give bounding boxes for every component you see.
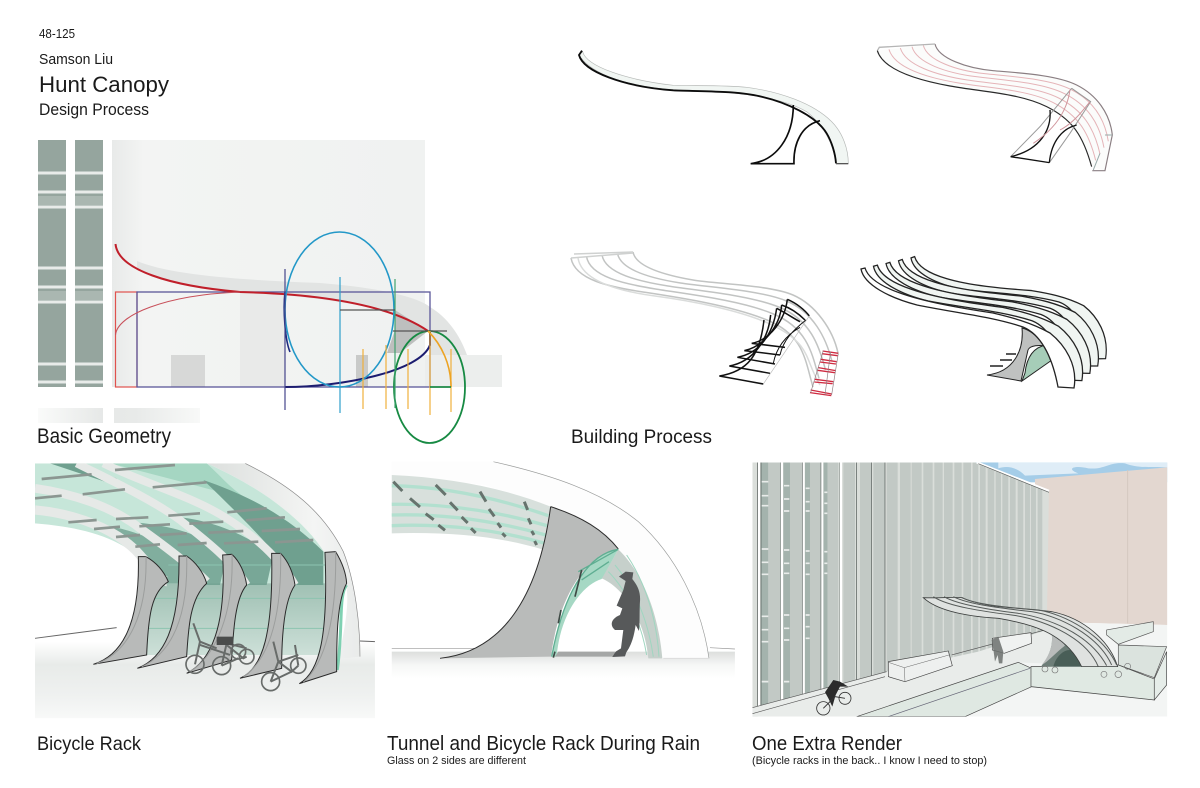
pedestrian	[992, 637, 1003, 663]
heading: basic geometry: Basic Geometry	[37, 425, 171, 448]
blue ellipse	[285, 232, 394, 387]
rear planter	[1107, 622, 1153, 644]
roof slats	[393, 482, 537, 545]
arch interior	[602, 549, 662, 658]
ground	[35, 650, 375, 716]
white canopy mass	[662, 652, 708, 658]
heading: one extra render: One Extra Render	[752, 733, 902, 755]
author name: Samson Liu	[39, 51, 113, 68]
front rib	[861, 268, 1075, 388]
glass ceiling band	[392, 475, 551, 550]
sidewalk	[752, 631, 1052, 716]
canopy ribs	[923, 597, 1118, 667]
support frame	[1011, 88, 1112, 170]
dark glass patches	[50, 463, 323, 585]
diagram: single rib profile	[579, 51, 848, 164]
far bench	[992, 633, 1032, 653]
person silhouette	[612, 572, 640, 657]
diagram: finished five-rib canopy	[861, 239, 1106, 388]
sky	[975, 462, 1167, 482]
heading: tunnel and bicycle rack: Tunnel and Bicycle Rack During Rain	[387, 733, 700, 755]
pink wall	[1035, 467, 1167, 625]
diagram: rib surface with red guide curves	[877, 44, 1112, 171]
five rib curves	[571, 252, 838, 387]
render: tunnel during rain	[392, 462, 735, 678]
white rib bands	[35, 463, 295, 585]
clouds	[998, 462, 1167, 476]
rear edge	[935, 44, 1112, 171]
top edge	[877, 44, 935, 51]
project number: 48-125	[39, 26, 75, 41]
red guide curves	[889, 45, 1108, 160]
caption: glass note: Glass on 2 sides are different	[387, 755, 526, 767]
cyclist	[817, 680, 851, 715]
white outer canopy wing	[207, 463, 360, 659]
front edge	[877, 51, 1092, 167]
panel: basic geometry	[38, 140, 502, 443]
back glass wall	[147, 583, 325, 655]
project title: Hunt Canopy	[39, 72, 170, 97]
thin red curve	[116, 292, 240, 335]
red base ladder	[810, 351, 838, 396]
green base line	[430, 386, 451, 388]
roof slats	[35, 465, 313, 547]
glass wall rails	[147, 565, 325, 628]
green ellipse	[394, 331, 465, 443]
left planter	[857, 662, 1032, 717]
glass arch	[1022, 345, 1052, 381]
bicycles	[186, 623, 306, 691]
navy circle arc	[284, 292, 290, 352]
heading: building process: Building Process	[571, 426, 712, 448]
building elevation backdrop	[38, 140, 502, 423]
construction axes	[285, 269, 451, 415]
long bench	[888, 651, 952, 682]
construction rectangles	[116, 292, 430, 387]
canopy arch	[1041, 633, 1082, 667]
render: bicycle rack	[35, 463, 375, 718]
canopy silhouette	[137, 261, 467, 355]
front planter	[1031, 665, 1154, 700]
orange arc	[428, 331, 451, 387]
diagram: array of ribs with arches	[571, 252, 838, 396]
subtitle: Design Process	[39, 101, 149, 119]
ground shadow	[555, 652, 615, 657]
navy curve	[285, 331, 430, 387]
base ticks	[990, 354, 1016, 366]
heading: bicycle rack: Bicycle Rack	[37, 734, 141, 755]
facade parapet	[977, 462, 1049, 491]
surface outline	[877, 44, 1112, 171]
fin creases	[97, 552, 336, 682]
caption: bicycle racks note: (Bicycle racks in the back.. I know I need to stop)	[752, 755, 987, 767]
fin ribs	[93, 552, 347, 684]
teal stripes	[392, 486, 548, 543]
glass ceiling	[35, 463, 325, 585]
render: extra exterior view	[752, 462, 1167, 719]
pool	[1118, 645, 1167, 678]
black arches	[719, 299, 809, 384]
glass edge right	[337, 585, 347, 670]
grey fin	[440, 507, 618, 658]
title block	[39, 26, 170, 119]
right ground	[965, 622, 1167, 717]
ribs	[873, 239, 1106, 385]
glass arch ceiling	[552, 549, 618, 657]
facade	[752, 462, 1049, 719]
floor	[392, 652, 735, 666]
small bicycles	[1042, 663, 1131, 678]
support fin	[987, 328, 1045, 381]
red curve	[116, 244, 428, 331]
